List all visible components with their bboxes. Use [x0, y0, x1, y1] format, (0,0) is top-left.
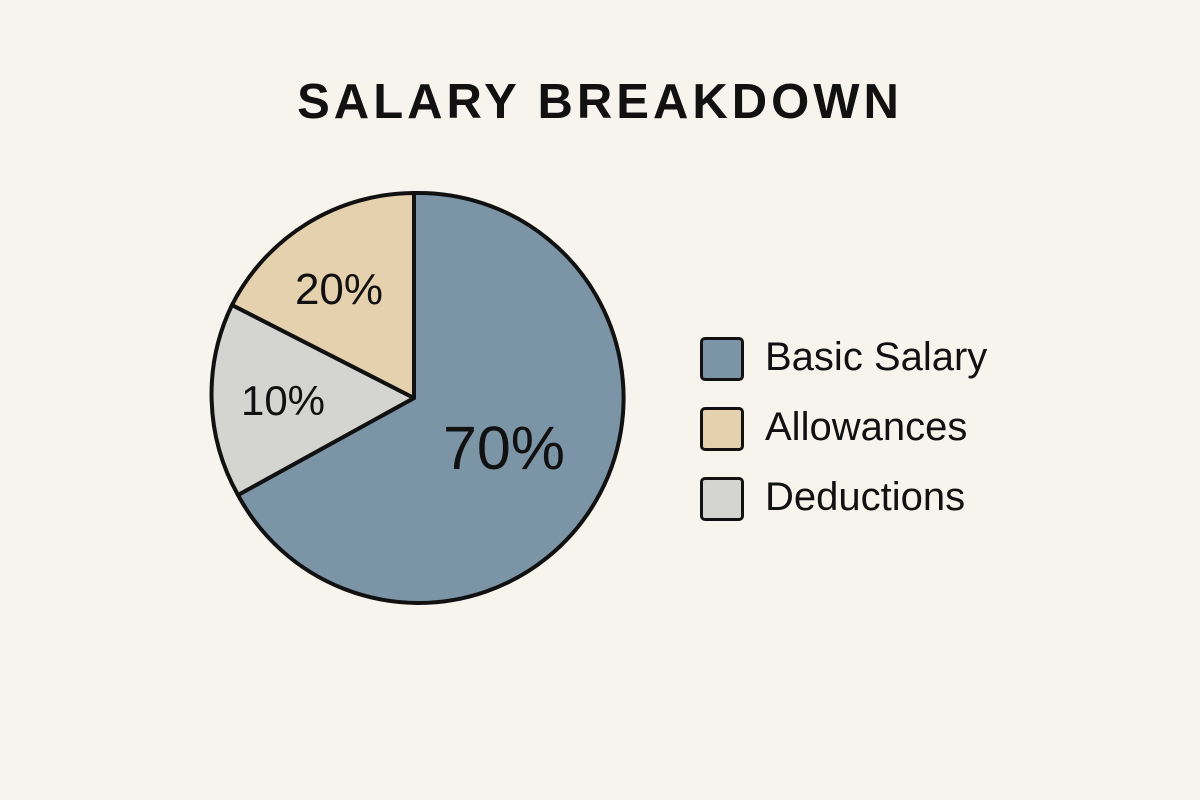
legend item: allowances: Allowances — [765, 405, 967, 449]
slice: deductions 10% — [212, 305, 414, 495]
label: 10%: 10% — [241, 377, 325, 424]
label: 70%: 70% — [443, 414, 565, 482]
legend — [700, 335, 988, 521]
title: SALARY BREAKDOWN — [297, 75, 903, 129]
slice: allowances 20% — [232, 193, 414, 398]
legend item: basic salary: Basic Salary — [765, 335, 987, 379]
legend item: deductions: Deductions — [765, 475, 965, 519]
slice: basic salary 70% — [238, 193, 624, 603]
label: 20%: 20% — [295, 265, 383, 314]
